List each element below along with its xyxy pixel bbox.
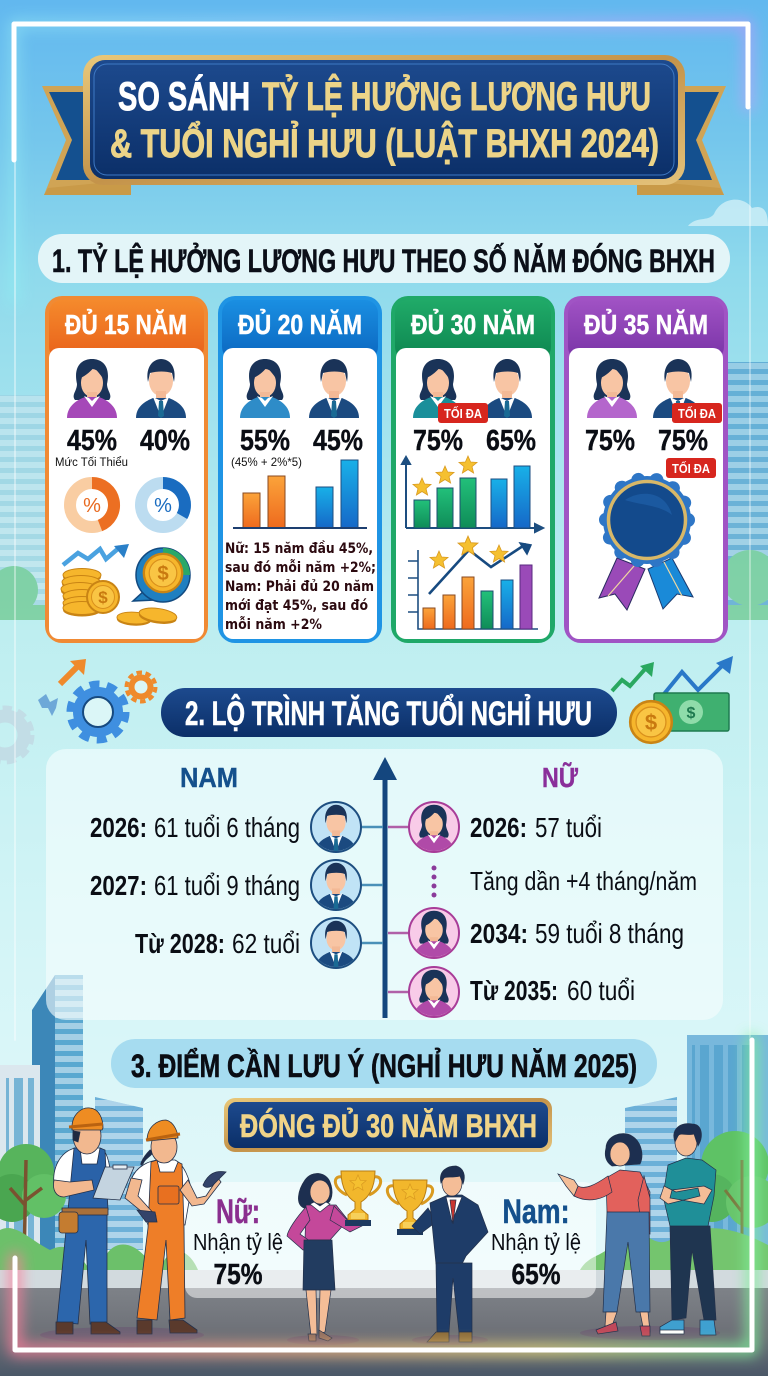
rate women: 55% <box>240 425 290 457</box>
row: nữ 2035 <box>388 967 635 1017</box>
explanation: sau đó mỗi năm +2%; <box>225 559 376 576</box>
row: nam 2027: 2027: <box>90 870 147 901</box>
plaque <box>83 55 685 185</box>
heading: ĐỦ 30 NĂM <box>411 308 535 340</box>
dots and yearly increase <box>432 866 697 898</box>
icon: trophy right <box>387 1180 433 1235</box>
section 2 heading <box>161 688 617 737</box>
icon: coin stack <box>61 568 119 616</box>
icon: small coins <box>117 606 178 627</box>
explanation <box>225 540 376 633</box>
heading: ĐỦ 15 NĂM <box>65 308 187 340</box>
rate women: 75% <box>413 425 463 457</box>
row: nam 2026 <box>90 802 383 852</box>
callout: nữ: Nữ: <box>216 1193 260 1231</box>
figure: woman gesturing <box>558 1134 650 1336</box>
row: nữ 2035: 60 tuổi <box>567 975 635 1006</box>
figure: man arms crossed <box>660 1124 716 1335</box>
icon: woman <box>413 359 463 418</box>
row: nữ 2034: 59 tuổi 8 tháng <box>535 918 684 949</box>
bar chart <box>233 460 367 529</box>
note: Mức Tối Thiểu <box>55 457 128 469</box>
row: nam 2027 <box>90 860 383 910</box>
rate men: 75% <box>658 425 708 457</box>
explanation: mới đạt 45%, sau đó <box>225 598 368 614</box>
section 2 heading: 2. LỘ TRÌNH TĂNG TUỔI NGHỈ HƯU <box>185 694 592 733</box>
section 3 heading: 3. ĐIỂM CẦN LƯU Ý (NGHỈ HƯU NĂM 2025) <box>131 1048 637 1084</box>
heading: ĐỦ 35 NĂM <box>584 308 708 340</box>
figure: worker with clipboard <box>53 1108 134 1334</box>
badge: tối đa <box>438 403 488 423</box>
icon: man <box>653 359 703 418</box>
row: nam 2027: 61 tuổi 9 tháng <box>154 870 300 901</box>
explanation: mỗi năm +2% <box>225 616 322 633</box>
callout: nữ: Nhận tỷ lệ <box>193 1229 283 1255</box>
rate men: 65% <box>486 425 536 457</box>
figure: worker in orange <box>125 1120 226 1334</box>
panel: đủ 15 năm <box>45 296 208 643</box>
panel: đủ 30 năm <box>391 296 555 643</box>
rate men: 40% <box>140 425 190 457</box>
row: nữ 2034: 2034: <box>470 918 528 949</box>
timeline axis arrow <box>373 757 397 1018</box>
donut orange <box>70 483 114 527</box>
panel: đủ 35 năm <box>564 296 728 643</box>
icon: woman <box>587 359 637 418</box>
rate women: 45% <box>67 425 117 457</box>
badge: tối đa second <box>666 458 716 478</box>
title text <box>110 73 659 166</box>
cloud <box>688 200 768 226</box>
badge: đóng đủ 30 năm: ĐÓNG ĐỦ 30 NĂM BHXH <box>240 1108 537 1144</box>
row: nam 2026: 2026: <box>90 812 147 843</box>
icon: rising arrow <box>63 544 129 565</box>
row: nữ 2026 <box>388 802 602 852</box>
donut blue <box>141 483 185 527</box>
row: nữ 2035: Từ 2035: <box>470 975 558 1006</box>
neon frame top <box>14 24 750 1040</box>
row: nam 2028 <box>135 918 383 968</box>
icon: medal <box>599 476 693 610</box>
callout: nam: 65% <box>512 1259 561 1291</box>
icon: trophy left <box>335 1171 381 1226</box>
icon: man <box>482 359 532 418</box>
section 1 heading <box>38 234 730 283</box>
icon: gears and arrow <box>0 659 156 761</box>
row: nam 2028: 62 tuổi <box>232 928 300 959</box>
ground <box>0 1270 768 1376</box>
icon: woman <box>240 359 290 418</box>
background city middle <box>0 362 768 620</box>
panel: đủ 20 năm <box>218 296 382 643</box>
icon: speech bubble coin <box>133 548 190 602</box>
donut blue: % <box>154 495 172 517</box>
badge: tối đa: TỐI ĐA <box>678 406 716 421</box>
ribbon left <box>42 86 131 195</box>
background city bottom right <box>580 1035 768 1270</box>
row: nữ 2026: 57 tuổi <box>535 812 602 843</box>
section 3 heading <box>111 1039 657 1088</box>
panel: timeline <box>46 749 723 1020</box>
neon frame bottom <box>15 1040 752 1350</box>
icon: man <box>136 359 186 418</box>
callout: nam: Nhận tỷ lệ <box>491 1229 581 1255</box>
rate women: 75% <box>585 425 635 457</box>
rate men: 45% <box>313 425 363 457</box>
callout: nam <box>491 1193 581 1291</box>
column heading nữ: NỮ <box>542 762 579 793</box>
icon: woman <box>67 359 117 418</box>
icon: man <box>309 359 359 418</box>
badge: tối đa: TỐI ĐA <box>444 406 482 421</box>
dots and yearly increase: Tăng dần +4 tháng/năm <box>470 866 697 896</box>
background city bottom left <box>0 975 198 1270</box>
donut orange: % <box>83 495 101 517</box>
panel: results backdrop <box>185 1182 596 1298</box>
badge: đóng đủ 30 năm <box>224 1098 552 1152</box>
column heading nam: NAM <box>180 762 238 793</box>
explanation: Nam: Phải đủ 20 năm <box>225 579 374 595</box>
row: nam 2026: 61 tuổi 6 tháng <box>154 812 300 843</box>
figure: man with trophy <box>412 1166 488 1342</box>
explanation: Nữ: 15 năm đầu 45%, <box>225 540 373 557</box>
row: nữ 2034 <box>388 908 684 958</box>
callout: nữ: 75% <box>214 1259 263 1291</box>
combo chart with stars <box>408 536 538 629</box>
row: nam 2028: Từ 2028: <box>135 928 225 959</box>
badge: tối đa <box>672 403 722 423</box>
bar chart with stars <box>402 456 543 532</box>
figure: woman with trophy <box>287 1173 362 1341</box>
callout: nữ <box>193 1193 283 1291</box>
badge: tối đa second: TỐI ĐA <box>672 461 710 476</box>
title text: SO SÁNH <box>118 74 250 119</box>
icon: money and arrows <box>612 656 733 743</box>
figure shadows <box>40 1326 720 1345</box>
title banner <box>42 55 726 195</box>
callout: nam: Nam: <box>502 1193 570 1231</box>
icon: money and arrows: $ <box>687 705 696 722</box>
row: nữ 2026: 2026: <box>470 812 527 843</box>
ribbon right <box>637 86 726 195</box>
heading: ĐỦ 20 NĂM <box>238 308 362 340</box>
formula: (45% + 2%*5) <box>231 455 302 469</box>
